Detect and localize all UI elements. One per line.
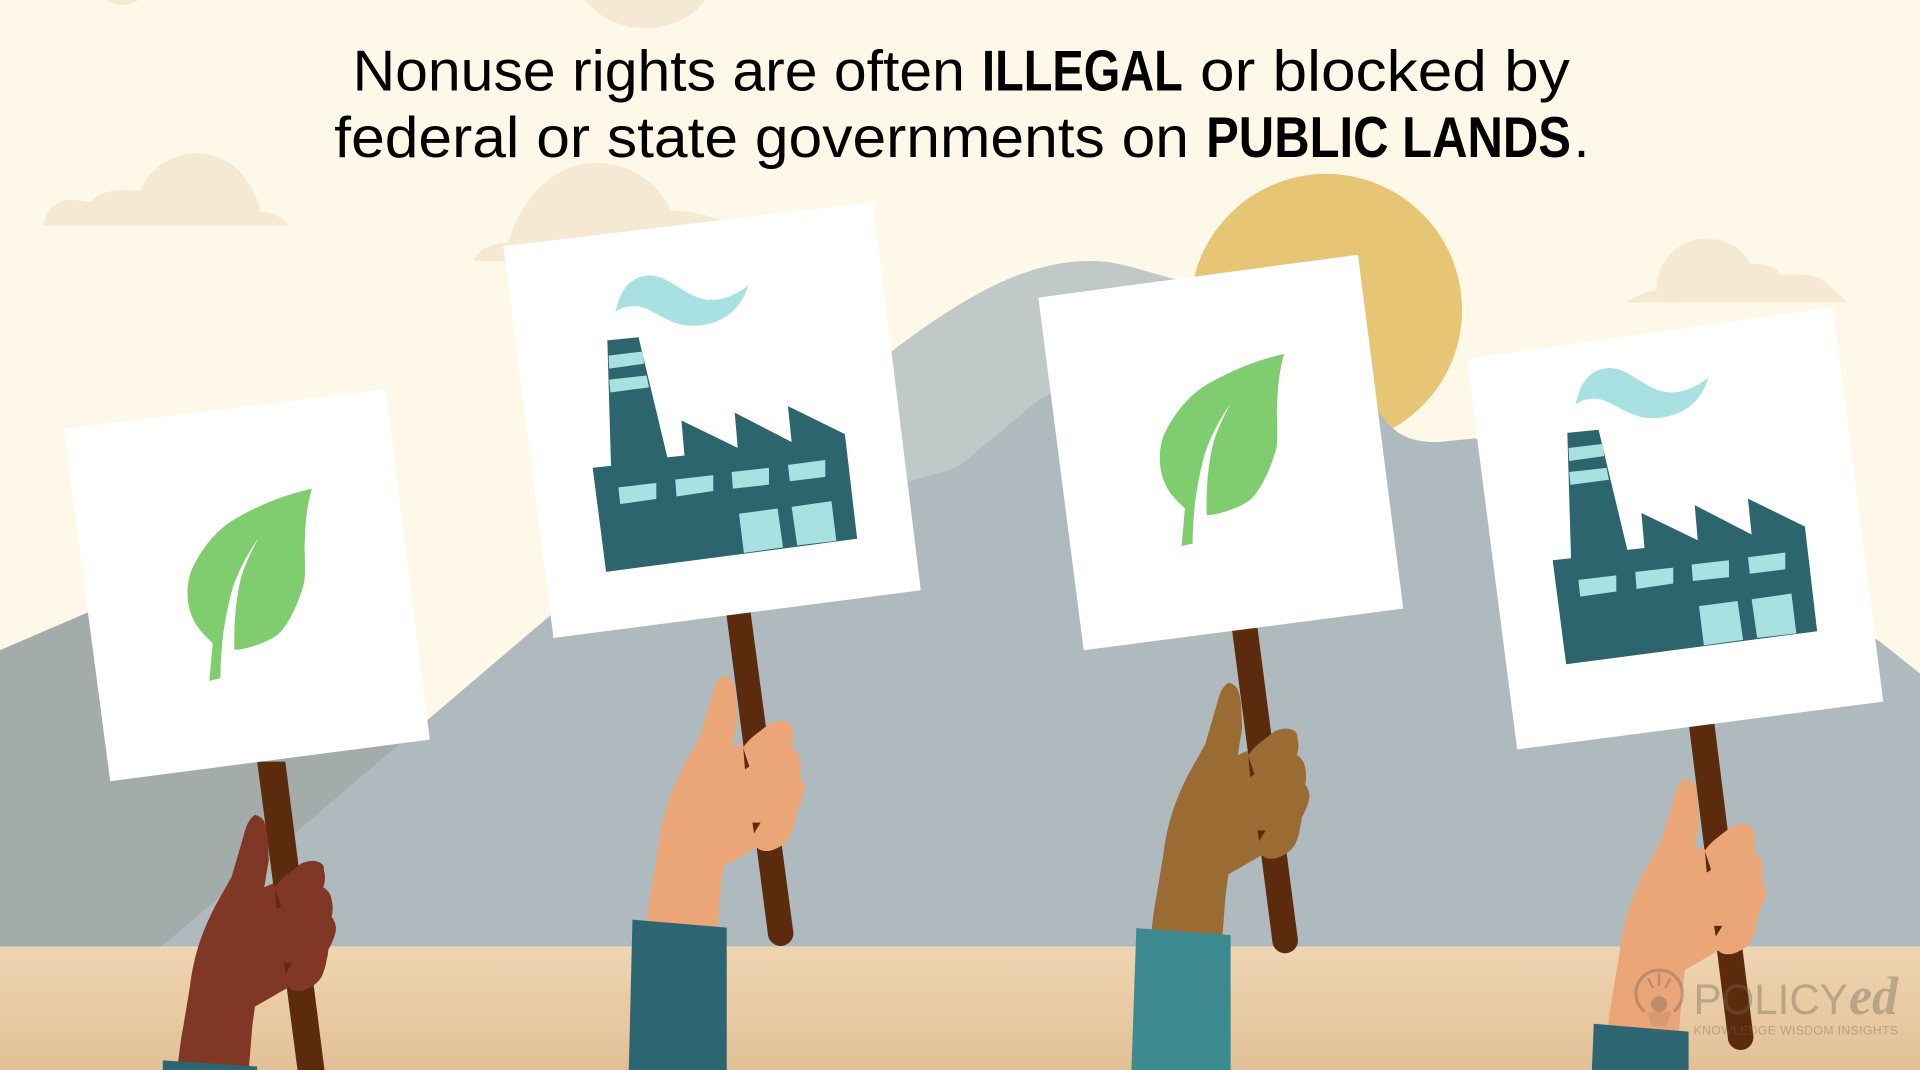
icon: factory 4 bbox=[1553, 368, 1817, 664]
protest sign 3: leaf, brown hand bbox=[1038, 255, 1403, 1070]
heading text: ILLEGAL bbox=[982, 40, 1183, 104]
sleeve 3 bbox=[1131, 928, 1231, 1070]
sleeve 2 bbox=[629, 920, 727, 1070]
hand 4 bbox=[1608, 778, 1766, 1031]
icon: factory 2 bbox=[593, 276, 857, 572]
watermark logo: PolicyEd: POLICY bbox=[1693, 976, 1848, 1024]
pole 4 bbox=[1689, 722, 1753, 1050]
heading text: PUBLIC LANDS bbox=[1206, 106, 1571, 170]
pole 1 bbox=[257, 762, 324, 1070]
clouds bbox=[43, 0, 1847, 302]
icon: leaf 1 bbox=[188, 489, 312, 681]
sign board 2 bbox=[503, 202, 921, 638]
ground bbox=[0, 947, 1920, 1070]
heading text bbox=[334, 40, 1589, 170]
watermark logo: PolicyEd: ed bbox=[1849, 966, 1899, 1026]
protest sign 4: factory, light hand bbox=[1467, 307, 1883, 1070]
heading text: federal or state governments on bbox=[334, 106, 1189, 170]
protest sign 1: leaf, dark hand bbox=[64, 389, 430, 1070]
protest sign 2: factory, light hand bbox=[503, 202, 921, 1070]
sun bbox=[1190, 174, 1462, 446]
hand 1 bbox=[178, 815, 336, 1068]
sleeve 1 bbox=[163, 1060, 257, 1070]
pole 2 bbox=[726, 612, 793, 946]
heading text: or blocked by bbox=[1200, 40, 1570, 104]
pole 3 bbox=[1232, 628, 1298, 953]
icon: leaf 3 bbox=[1160, 354, 1284, 546]
sign board 3 bbox=[1038, 255, 1403, 650]
sign board 4 bbox=[1467, 307, 1883, 749]
hand 2 bbox=[646, 675, 804, 928]
sleeve 4 bbox=[1592, 1024, 1689, 1070]
mountains bbox=[0, 261, 1920, 947]
hand 3 bbox=[1151, 683, 1309, 936]
watermark logo: PolicyEd: KNOWLEDGE WISDOM INSIGHTS bbox=[1693, 1024, 1898, 1038]
heading text: . bbox=[1573, 106, 1589, 170]
heading text: Nonuse rights are often bbox=[353, 40, 965, 104]
sign board 1 bbox=[64, 389, 430, 781]
icon: light bulb bbox=[1636, 970, 1682, 1033]
watermark logo: PolicyEd bbox=[1636, 966, 1899, 1038]
